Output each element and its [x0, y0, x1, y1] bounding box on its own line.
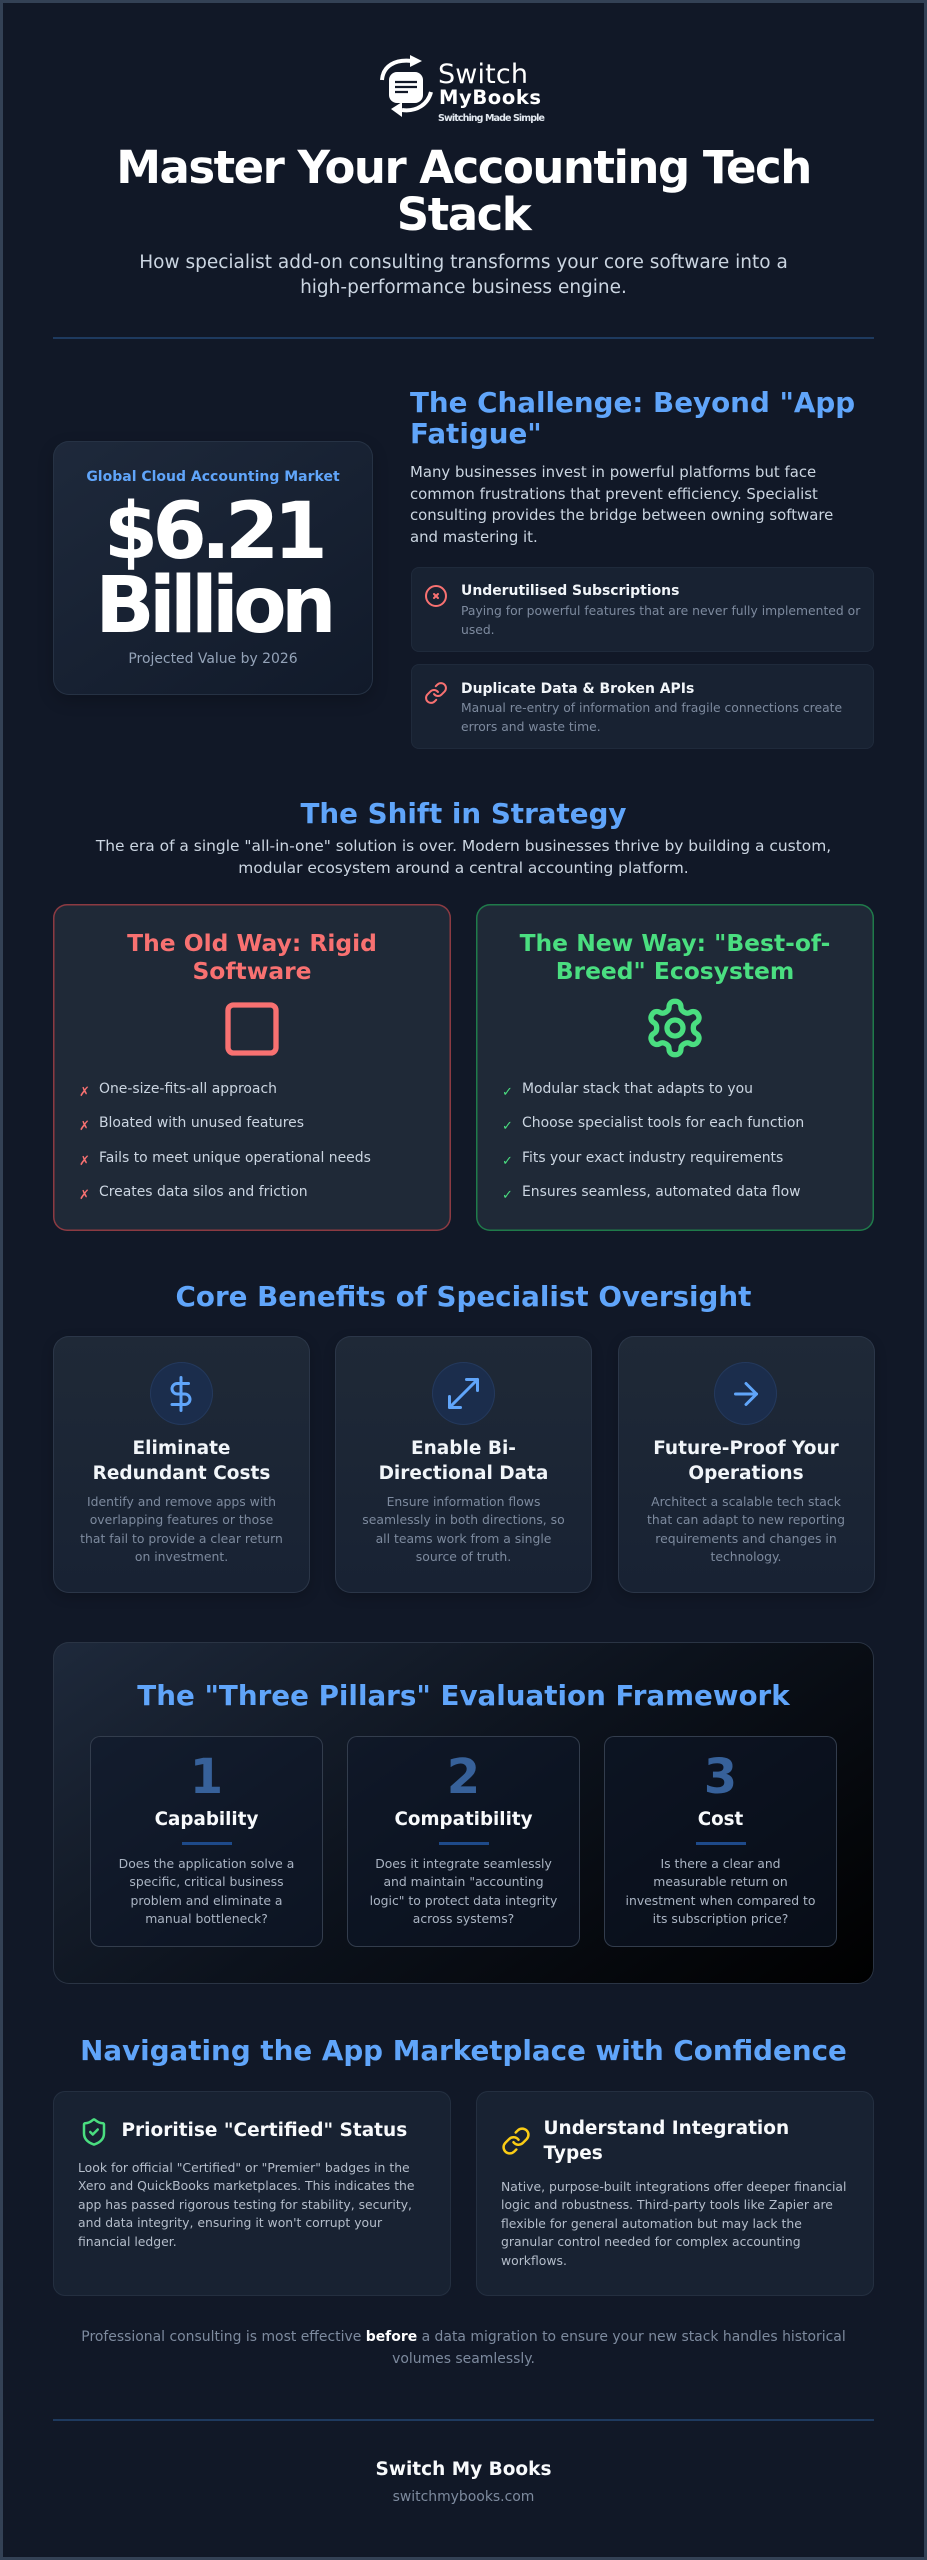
challenge paragraph	[410, 463, 833, 546]
card body: financial ledger.	[78, 2234, 177, 2249]
benefit title: Redundant Costs	[93, 1463, 270, 1484]
old way list: Creates data silos and friction	[99, 1184, 308, 1200]
pillar: capability	[90, 1736, 323, 1947]
title: Master Your Accounting Tech	[116, 140, 811, 194]
pillar title: Compatibility	[394, 1809, 532, 1830]
footer url: switchmybooks.com	[393, 2489, 534, 2505]
benefit title: Eliminate	[132, 1438, 230, 1459]
new way list: ✓	[502, 1188, 513, 1203]
pillar description: Does the application solve a	[119, 1856, 294, 1870]
new way heading: Breed" Ecosystem	[556, 957, 794, 985]
panel: old way	[53, 904, 451, 1231]
stat card: market value	[53, 441, 373, 695]
pillar description: problem and eliminate a	[131, 1892, 282, 1908]
old way list: One-size-fits-all approach	[99, 1081, 277, 1097]
heading: navigating the marketplace: Navigating the App Marketplace with Confidence	[80, 2034, 847, 2066]
pillar description: manual bottleneck?	[145, 1911, 268, 1926]
new way list: Choose specialist tools for each function	[522, 1115, 804, 1131]
logo: Switch	[438, 59, 528, 90]
heading: core benefits: Core Benefits of Specialist Oversight	[176, 1280, 751, 1312]
new way heading: The New Way: "Best-of-	[520, 929, 830, 957]
stat label: Global Cloud Accounting Market	[86, 469, 340, 485]
pillar description: measurable return on	[653, 1874, 788, 1889]
old way list: ✗	[79, 1085, 90, 1100]
old way list: ✗	[79, 1154, 90, 1168]
challenge item: underutilised subscriptions	[411, 567, 874, 652]
panel: certified status	[53, 2090, 451, 2296]
pillar: cost	[604, 1736, 837, 1947]
strategy intro	[96, 837, 831, 877]
new way list: Fits your exact industry requirements	[522, 1150, 783, 1166]
old way list	[79, 1081, 371, 1203]
new way list: ✓	[502, 1085, 513, 1100]
stat caption: Projected Value by 2026	[128, 651, 298, 667]
card body: Look for official "Certified" or "Premier" badges in the	[78, 2160, 410, 2175]
benefit description: technology.	[710, 1549, 781, 1564]
item description: used.	[461, 622, 495, 636]
benefit card: data	[335, 1336, 592, 1593]
benefit description: Architect a scalable tech stack	[651, 1494, 841, 1508]
pillar description: across systems?	[413, 1911, 514, 1926]
new way heading	[520, 929, 830, 985]
benefit description: seamlessly in both directions, so	[362, 1512, 565, 1527]
old way list: ✗	[79, 1188, 90, 1203]
challenge paragraph: Many businesses invest in powerful platforms but face	[410, 463, 816, 481]
item description: errors and waste time.	[461, 720, 601, 734]
pillar description: Is there a clear and	[660, 1856, 781, 1870]
pillar number: 2	[447, 1749, 480, 1805]
old way list: ✗	[79, 1119, 90, 1134]
strategy intro: modular ecosystem around a central accounting platform.	[238, 859, 689, 877]
item description	[461, 604, 860, 636]
framework heading: The "Three Pillars" Evaluation Framework	[137, 1678, 790, 1712]
subtitle: high-performance business engine.	[300, 276, 627, 298]
card body: logic and robustness. Third-party tools like Zapier are	[501, 2197, 833, 2212]
consulting note	[81, 2329, 846, 2367]
pillar number: 1	[190, 1749, 223, 1805]
stat value	[95, 486, 331, 650]
subtitle	[139, 252, 788, 298]
consulting note: volumes seamlessly.	[392, 2351, 535, 2367]
old way list: Bloated with unused features	[99, 1115, 304, 1131]
card body: Native, purpose-built integrations offer deeper financial	[501, 2178, 846, 2194]
card body: app has passed rigorous testing for stability, security,	[78, 2197, 412, 2212]
new way list	[502, 1081, 804, 1203]
heading: the challenge	[410, 386, 855, 450]
old way heading: Software	[192, 957, 312, 985]
subtitle: How specialist add-on consulting transforms your core software into a	[139, 252, 788, 272]
pillar bar	[182, 1842, 232, 1844]
stat value: Billion	[95, 560, 331, 650]
benefit description	[362, 1494, 565, 1564]
challenge paragraph: and mastering it.	[410, 528, 538, 546]
benefit description	[647, 1494, 845, 1564]
item description	[461, 701, 842, 734]
pillar description	[626, 1856, 815, 1926]
challenge paragraph: common frustrations that prevent efficiency. Specialist	[410, 485, 818, 503]
card body: and data integrity, ensuring it won't corrupt your	[78, 2215, 382, 2230]
pillar description	[119, 1856, 294, 1926]
card body: Xero and QuickBooks marketplaces. This indicates the	[78, 2178, 415, 2193]
icon: gear	[648, 998, 702, 1058]
benefit title	[653, 1438, 839, 1484]
benefit description: overlapping features or those	[90, 1512, 273, 1527]
challenge paragraph: consulting provides the bridge between owning software	[410, 506, 833, 524]
consulting note: Professional consulting is most effective before a data migration to ensure your new stack handles historical	[81, 2329, 846, 2345]
benefit description: requirements and changes in	[655, 1530, 837, 1546]
item description: Manual re-entry of information and fragile connections create	[461, 701, 842, 715]
heading: the challenge: The Challenge: Beyond "App	[410, 386, 855, 419]
panel: three pillars framework	[53, 1642, 874, 1984]
heading: shift in strategy: The Shift in Strategy	[300, 796, 627, 830]
old way list: Fails to meet unique operational needs	[99, 1150, 371, 1166]
benefit card: costs	[53, 1336, 310, 1593]
new way list: ✓	[502, 1154, 513, 1168]
benefit description: all teams work from a single	[376, 1530, 551, 1546]
pillar: compatibility	[347, 1736, 580, 1947]
card title: Types	[544, 2142, 603, 2164]
pillar description: investment when compared to	[626, 1892, 815, 1908]
new way list: Modular stack that adapts to you	[522, 1081, 753, 1097]
benefit description: Ensure information flows	[387, 1494, 540, 1508]
benefit title	[93, 1438, 270, 1484]
pillar description: its subscription price?	[653, 1911, 788, 1926]
benefit title	[379, 1438, 548, 1484]
pillar number: 3	[704, 1749, 737, 1805]
pillar bar	[696, 1842, 746, 1844]
old way heading	[127, 929, 377, 985]
pillar bar	[438, 1842, 488, 1844]
card body: flexible for general automation but may lack the	[501, 2216, 802, 2231]
icon: dollar	[150, 1362, 212, 1425]
icon: square	[225, 1002, 279, 1056]
card body: granular control needed for complex accounting	[501, 2234, 801, 2249]
pillar description: logic" to protect data integrity	[370, 1892, 557, 1908]
benefit description: source of truth.	[416, 1549, 511, 1564]
pillar description: and maintain "accounting	[383, 1874, 544, 1889]
card title	[544, 2118, 789, 2164]
pillar title: Cost	[698, 1809, 743, 1830]
benefit description: Identify and remove apps with	[87, 1494, 276, 1508]
pillar description: specific, critical business	[129, 1874, 284, 1889]
strategy intro: The era of a single "all-in-one" solution is over. Modern businesses thrive by building a custom,	[96, 837, 831, 855]
item description: Paying for powerful features that are never fully implemented or	[461, 604, 860, 618]
icon: link	[502, 2127, 530, 2155]
footer brand: Switch My Books	[376, 2459, 551, 2480]
icon: x circle	[425, 585, 447, 607]
title: Stack	[397, 188, 530, 240]
pillar description	[370, 1856, 557, 1926]
title	[116, 140, 811, 240]
icon: arrow right	[714, 1362, 777, 1425]
benefit description: on investment.	[135, 1549, 228, 1564]
card body	[78, 2160, 415, 2249]
logo: Switching Made Simple	[438, 113, 545, 124]
icon: diagonal arrows	[432, 1362, 494, 1425]
card title: Prioritise "Certified" Status	[122, 2120, 407, 2141]
new way list: Ensures seamless, automated data flow	[522, 1184, 801, 1200]
card body	[501, 2178, 846, 2268]
stat value: $6.21	[104, 486, 322, 576]
icon: link	[425, 682, 447, 704]
logo	[380, 55, 545, 124]
pillar title: Capability	[155, 1809, 258, 1830]
heading: the challenge: Fatigue"	[410, 417, 542, 450]
panel: new way	[476, 904, 874, 1231]
benefit description: that can adapt to new reporting	[647, 1512, 845, 1527]
benefit card: future proof	[618, 1336, 874, 1593]
item title: Duplicate Data & Broken APIs	[461, 680, 694, 696]
benefit title: Directional Data	[379, 1463, 548, 1484]
pillar description: Does it integrate seamlessly	[375, 1856, 552, 1870]
benefit title: Future-Proof Your	[653, 1438, 839, 1459]
icon: shield check	[82, 2118, 106, 2146]
card body: workflows.	[501, 2253, 567, 2268]
benefit description: that fail to provide a clear return	[80, 1530, 283, 1546]
card title: Understand Integration	[544, 2118, 789, 2138]
panel: integration types	[476, 2090, 874, 2296]
new way list: ✓	[502, 1119, 513, 1134]
old way heading: The Old Way: Rigid	[127, 929, 377, 957]
logo: MyBooks	[439, 86, 541, 109]
icon: logo document with arrows	[382, 55, 431, 117]
benefit title: Operations	[688, 1463, 804, 1484]
item title: Underutilised Subscriptions	[461, 583, 679, 599]
benefit title: Enable Bi-	[411, 1438, 516, 1459]
benefit description	[80, 1494, 283, 1564]
challenge item: duplicate data	[411, 664, 874, 749]
